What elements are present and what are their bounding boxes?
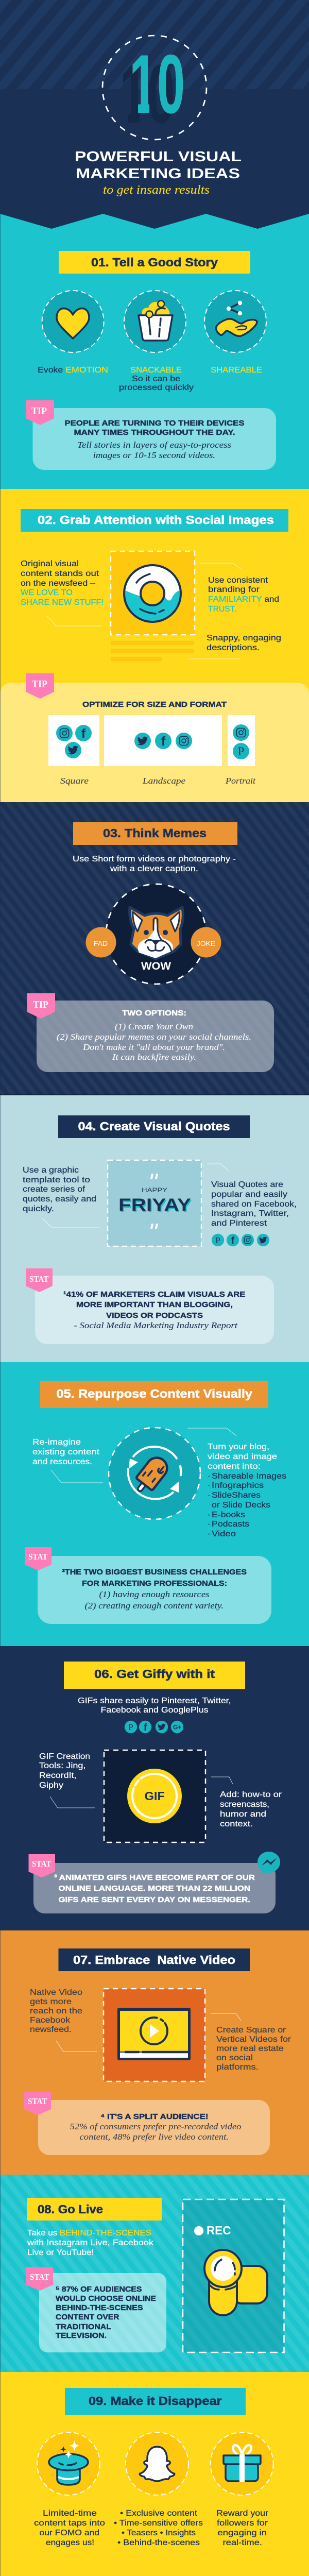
stat panel 06: ³ ANIMATED GIFS HAVE BECOME PART OF OUR [54, 1873, 255, 1882]
section: 01 Tell a Good Story [0, 214, 309, 489]
format labels: Square [60, 776, 89, 786]
text: square video: on social [216, 2054, 253, 2062]
title [75, 148, 242, 181]
text: add how-to: screencasts, [220, 1800, 269, 1809]
text: limited-time: Limited-time [43, 2509, 97, 2518]
format list: · [208, 1511, 210, 1519]
stat tag: STAT [29, 1274, 49, 1284]
stat tag [26, 1268, 53, 1292]
text: re-imagine [32, 1438, 100, 1466]
section: 03 Think Memes [0, 802, 309, 1095]
text: template tool: Use a graphic [23, 1166, 79, 1175]
wow caption: WOW [141, 960, 171, 972]
stat panel 08: TRADITIONAL [56, 2323, 111, 2331]
caption: snackable [119, 366, 194, 392]
icon: magic hat [37, 2432, 100, 2495]
connector lower right [187, 658, 241, 659]
tip tag [27, 993, 55, 1019]
text: popular quotes: Visual Quotes are [211, 1180, 283, 1189]
tip tag: TIP [32, 679, 47, 690]
text: original content: WE LOVE TO [21, 588, 73, 597]
tip panel 03: (1) Create Your Own [115, 1022, 193, 1031]
tip panel 03: TWO OPTIONS: [122, 1009, 186, 1018]
connector right [207, 1164, 229, 1172]
section: 05 Repurpose Content Visually [0, 1362, 309, 1646]
tip panel 01 [26, 400, 276, 470]
text: branding: FAMILIARITY and [208, 595, 279, 604]
section: 04 Create Visual Quotes [0, 1095, 309, 1362]
text: popular quotes: popular and easily [211, 1190, 287, 1199]
icon: messenger bubble [258, 1852, 280, 1874]
icon: video camera [204, 2250, 267, 2315]
caption: snackable: So it can be [132, 375, 180, 383]
stat panel 04: ¹41% OF MARKETERS CLAIM VISUALS ARE [63, 1290, 245, 1299]
text: template tool: create series of [23, 1185, 85, 1194]
tip panel 02: OPTIMIZE FOR SIZE AND FORMAT [82, 700, 227, 709]
section: 07 Embrace Native Video [0, 1930, 309, 2175]
tip tag [26, 400, 54, 425]
text: square video: platforms. [216, 2063, 259, 2072]
connector right [200, 563, 241, 569]
format labels: Landscape [142, 776, 186, 786]
heading 07 [59, 1948, 250, 1971]
text: turn your blog: content into: [208, 1462, 261, 1471]
portrait format: P [238, 745, 244, 758]
text: branding: branding for [208, 585, 260, 594]
intro text: Take us BEHIND-THE-SCENES [27, 2229, 151, 2238]
tip panel 03: It can backfire easily. [112, 1052, 196, 1062]
stat panel 08: CONTENT OVER [56, 2313, 119, 2321]
text: re-imagine: and resources. [32, 1458, 92, 1466]
section: 06 Get Giffy with it [0, 1646, 309, 1930]
badge: fad: FAD [94, 939, 108, 947]
text: original content: on the newsfeed – [21, 579, 95, 588]
tip panel 01: images or 10-15 second videos. [93, 450, 215, 460]
tip tag [26, 673, 54, 699]
friyay lettering: FRIYAY [119, 1197, 192, 1216]
stat panel 05: FOR MARKETING PROFESSIONALS: [82, 1579, 227, 1588]
heading 02 [21, 509, 288, 532]
social icons row: P [128, 1722, 133, 1732]
social icons row: P [215, 1235, 220, 1245]
connector right [211, 2013, 241, 2021]
text: native video: Facebook [30, 2016, 71, 2025]
stat panel 07: ⁴ IT'S A SPLIT AUDIENCE! [100, 2112, 208, 2121]
intro text [73, 855, 236, 873]
stat panel 04 [26, 1268, 274, 1344]
text: snapchat ideas: • Exclusive content [120, 2509, 198, 2518]
stat panel 04: VIDEOS OR PODCASTS [106, 1311, 203, 1320]
stat tag [24, 2092, 51, 2115]
connector left [50, 1797, 95, 1808]
big number 10 [123, 55, 183, 124]
intro text: Facebook and GooglePlus [101, 1706, 208, 1715]
stat panel 05: ²THE TWO BIGGEST BUSINESS CHALLENGES [62, 1568, 247, 1577]
stat panel 04: MORE IMPORTANT THAN BLOGGING, [76, 1300, 233, 1309]
text: reward followers: engaging in [217, 2529, 267, 2537]
icon: cupcake [124, 291, 186, 352]
section: 09 Make it Disappear [0, 2372, 309, 2576]
portrait format [228, 715, 255, 766]
caption: shareable: SHAREABLE [211, 366, 262, 375]
stat panel 08: BEHIND-THE-SCENES [56, 2303, 143, 2312]
icon: sharing hand [204, 291, 266, 352]
stat tag [25, 1547, 52, 1570]
text: add how-to [220, 1790, 282, 1828]
caption: snackable: processed quickly [119, 383, 194, 392]
format labels [60, 776, 256, 786]
heading 01: 01. Tell a Good Story [91, 256, 218, 269]
square format: f [81, 726, 86, 741]
format list: Podcasts [212, 1520, 249, 1529]
format list: · [208, 1520, 210, 1529]
text: descriptions: descriptions. [207, 643, 260, 652]
text: original content: SHARE NEW STUFF! [21, 598, 104, 607]
heading 07: 07. Embrace Native Video [73, 1953, 235, 1967]
big number 10: 10 [129, 38, 185, 131]
video card [104, 1989, 205, 2081]
tip panel 03: (2) Share popular memes on your social channels. [57, 1032, 251, 1042]
text: popular quotes: and Pinterest [211, 1219, 267, 1228]
text: snapchat ideas: • Behind-the-scenes [117, 2538, 200, 2547]
text: limited-time: content taps into [34, 2519, 105, 2528]
text: descriptions: Snappy, engaging [207, 634, 281, 642]
text: reward followers [216, 2509, 269, 2547]
icon: heart [42, 291, 104, 352]
text: reward followers: real-time. [222, 2538, 262, 2547]
gif coin: GIF [144, 1789, 165, 1803]
format list: · [208, 1491, 210, 1500]
text: reward followers: Reward your [216, 2509, 269, 2518]
stat panel 05: (2) creating enough content variety. [84, 1601, 224, 1611]
heading 04 [58, 1115, 250, 1138]
social icons row [212, 1234, 269, 1246]
text: snapchat ideas: • Time-sensitive offers [114, 2519, 203, 2528]
stat panel 08: ⁵ 87% OF AUDIENCES [56, 2285, 142, 2294]
caption: emotion: Evoke EMOTION [38, 366, 108, 375]
text: square video: Vertical Videos for [216, 2035, 291, 2044]
stat tag: STAT [32, 1859, 52, 1869]
big number 10: 10 [119, 47, 175, 141]
tip panel 02 [0, 673, 309, 802]
format list: SlideShares [212, 1491, 261, 1500]
intro text: with a clever caption. [110, 865, 198, 873]
text: popular quotes: shared on Facebook, [211, 1200, 297, 1209]
subtitle: to get insane results [103, 183, 210, 197]
text: native video: newsfeed. [30, 2025, 72, 2034]
text: template tool: template tool to [23, 1176, 90, 1184]
icon: corgi [130, 907, 183, 959]
stat tag: STAT [30, 2272, 49, 2282]
quote card [108, 1160, 201, 1246]
icon: gift box [211, 2432, 273, 2495]
heading 09 [65, 2388, 246, 2415]
section: 08 Go Live [0, 2175, 309, 2372]
landscape format [104, 715, 222, 766]
text: original content: content stands out [21, 569, 99, 578]
quote mark bottom [150, 1224, 158, 1229]
text: template tool: quickly. [23, 1205, 54, 1213]
text: snapchat ideas [114, 2509, 203, 2547]
intro text [78, 1697, 231, 1715]
stat panel 05 [25, 1547, 271, 1624]
heading 06 [64, 1662, 245, 1689]
tip panel 01: PEOPLE ARE TURNING TO THEIR DEVICES [65, 419, 244, 428]
text: re-imagine: existing content [32, 1448, 100, 1456]
connector left [51, 1470, 103, 1483]
stat panel 06 [29, 1852, 280, 1913]
text: popular quotes: Instagram, Twitter, [211, 1209, 289, 1218]
text: original content [21, 560, 104, 607]
landscape format: f [161, 734, 166, 749]
text: re-imagine: Re-imagine [32, 1438, 81, 1447]
heading 08: 08. Go Live [38, 2202, 103, 2216]
gif card [104, 1750, 205, 1842]
heading 01 [59, 251, 250, 274]
caption: snackable: SNACKABLE [130, 366, 182, 375]
stat tag [26, 2267, 53, 2291]
heading 03: 03. Think Memes [103, 826, 207, 840]
text: reward followers: followers for [217, 2519, 268, 2528]
text: add how-to: context. [220, 1820, 253, 1828]
text: original content: Original visual [21, 560, 79, 568]
friyay lettering: FRIYAY [118, 1195, 191, 1215]
connector left [47, 616, 101, 626]
heading 06: 06. Get Giffy with it [94, 1667, 215, 1681]
title: POWERFUL VISUAL [75, 148, 242, 164]
text: descriptions [207, 634, 281, 652]
format list: Shareable Images [212, 1472, 286, 1481]
text: gif tools: Tools: Jing, [39, 1761, 85, 1770]
badge: joke: JOKE [197, 939, 215, 947]
text: native video: gets more [30, 1997, 72, 2006]
heading 02: 02. Grab Attention with Social Images [38, 513, 274, 527]
connector left [42, 1218, 99, 1227]
text: snapchat ideas: • Teasers • Insights [122, 2529, 196, 2537]
stat panel 06: GIFS ARE SENT EVERY DAY ON MESSENGER. [59, 1895, 250, 1904]
text: limited-time: engages us! [46, 2538, 94, 2547]
format list: Infographics [212, 1481, 264, 1490]
format list: · [208, 1530, 210, 1538]
intro text: GIFs share easily to Pinterest, Twitter, [78, 1697, 231, 1705]
stat tag: STAT [28, 1552, 48, 1562]
text: add how-to: Add: how-to or [220, 1790, 282, 1799]
text: template tool [23, 1166, 96, 1213]
text: native video [30, 1988, 82, 2034]
icon: donut [124, 565, 181, 622]
stat panel 07: content, 48% prefer live video content. [79, 2132, 229, 2142]
big number 10: 10 [129, 38, 185, 131]
heading 05: 05. Repurpose Content Visually [57, 1387, 252, 1400]
heading 04: 04. Create Visual Quotes [78, 1120, 230, 1133]
square format [48, 715, 99, 766]
gif coin [127, 1769, 182, 1823]
text: add how-to: humor and [220, 1810, 266, 1819]
social icons row: f [231, 1235, 235, 1246]
format labels: Portrait [225, 776, 256, 786]
stat tag: STAT [28, 2096, 47, 2106]
text: turn your blog [208, 1443, 286, 1538]
intro text: with Instagram Live, Facebook [27, 2239, 154, 2247]
format list: or Slide Decks [212, 1501, 270, 1510]
tip panel 01: Tell stories in layers of easy-to-process [77, 440, 231, 450]
stat panel 06: ONLINE LANGUAGE. MORE THAN 22 MILLION [59, 1884, 250, 1893]
tip tag: TIP [33, 999, 48, 1010]
dashed ring around number [102, 36, 207, 140]
text: popular quotes [211, 1180, 297, 1228]
text: limited-time: our FOMO and [39, 2529, 99, 2537]
rec label [194, 2224, 231, 2237]
stat panel 08 [26, 2267, 166, 2352]
tip panel 01: MANY TIMES THROUGHOUT THE DAY. [74, 428, 235, 437]
format list [208, 1472, 286, 1538]
section: hero header [0, 0, 309, 196]
text: branding: TRUST. [208, 605, 236, 614]
recording card [183, 2199, 284, 2352]
social post mockup with donut [111, 551, 195, 661]
intro text: Live or YouTube! [27, 2248, 94, 2257]
text: native video: reach on the [30, 2007, 82, 2015]
text: turn your blog: Turn your blog, [208, 1443, 269, 1451]
text: branding [208, 576, 279, 614]
text: square video: more real estate [216, 2044, 284, 2053]
quote mark top [150, 1174, 158, 1179]
text: template tool: quotes, easily and [23, 1195, 96, 1204]
text: gif tools: GIF Creation [39, 1752, 90, 1761]
text: branding: Use consistent [208, 576, 268, 585]
quote card: HAPPY [142, 1187, 167, 1194]
section: 02 Grab Attention [0, 489, 309, 802]
icon: recycle popsicle circle [109, 1428, 200, 1519]
format list: E-books [212, 1511, 245, 1519]
text: limited-time [34, 2509, 105, 2547]
social icons row: f [144, 1722, 147, 1733]
badge: joke [191, 927, 221, 957]
icon: video player [117, 2008, 191, 2060]
meme circle [85, 884, 221, 984]
intro text [27, 2229, 154, 2257]
icon: snapchat ghost [126, 2432, 188, 2495]
stat tag [29, 1854, 55, 1877]
social icons row: G+ [173, 1724, 181, 1731]
connector right [187, 1428, 236, 1436]
stat panel 08: TELEVISION. [56, 2331, 107, 2340]
title: MARKETING IDEAS [76, 165, 240, 181]
badge: fad [85, 927, 116, 957]
format list: · [208, 1481, 210, 1490]
text: gif tools [39, 1752, 90, 1790]
format list: · [208, 1472, 210, 1481]
stat panel 05: (1) having enough resources [99, 1589, 210, 1599]
heading 03 [73, 822, 237, 845]
stat panel 07 [24, 2092, 270, 2155]
stat panel 08: WOULD CHOOSE ONLINE [56, 2294, 156, 2303]
tip panel 03: Don't make it "all about your brand". [82, 1042, 225, 1052]
tip panel 03 [27, 993, 274, 1072]
intro text: Use Short form videos or photography - [73, 855, 236, 863]
text: square video [216, 2026, 291, 2072]
tip tag: TIP [31, 405, 47, 417]
text: native video: Native Video [30, 1988, 82, 1997]
connector left [56, 2041, 97, 2052]
heading 05 [40, 1381, 268, 1408]
text: gif tools: RecordIt, [39, 1771, 76, 1780]
stat panel 04: - Social Media Marketing Industry Report [74, 1320, 238, 1330]
heading 09: 09. Make it Disappear [89, 2394, 222, 2408]
text: square video: Create Square or [216, 2026, 286, 2035]
format list: Video [212, 1530, 236, 1538]
rec label: REC [207, 2224, 231, 2237]
stat panel 07: 52% of consumers prefer pre-recorded video [70, 2122, 241, 2131]
text: turn your blog: video and image [208, 1452, 277, 1461]
heading 08 [27, 2198, 162, 2221]
text: gif tools: Giphy [39, 1781, 63, 1790]
social icons row [125, 1721, 183, 1733]
connector right [211, 1777, 233, 1784]
